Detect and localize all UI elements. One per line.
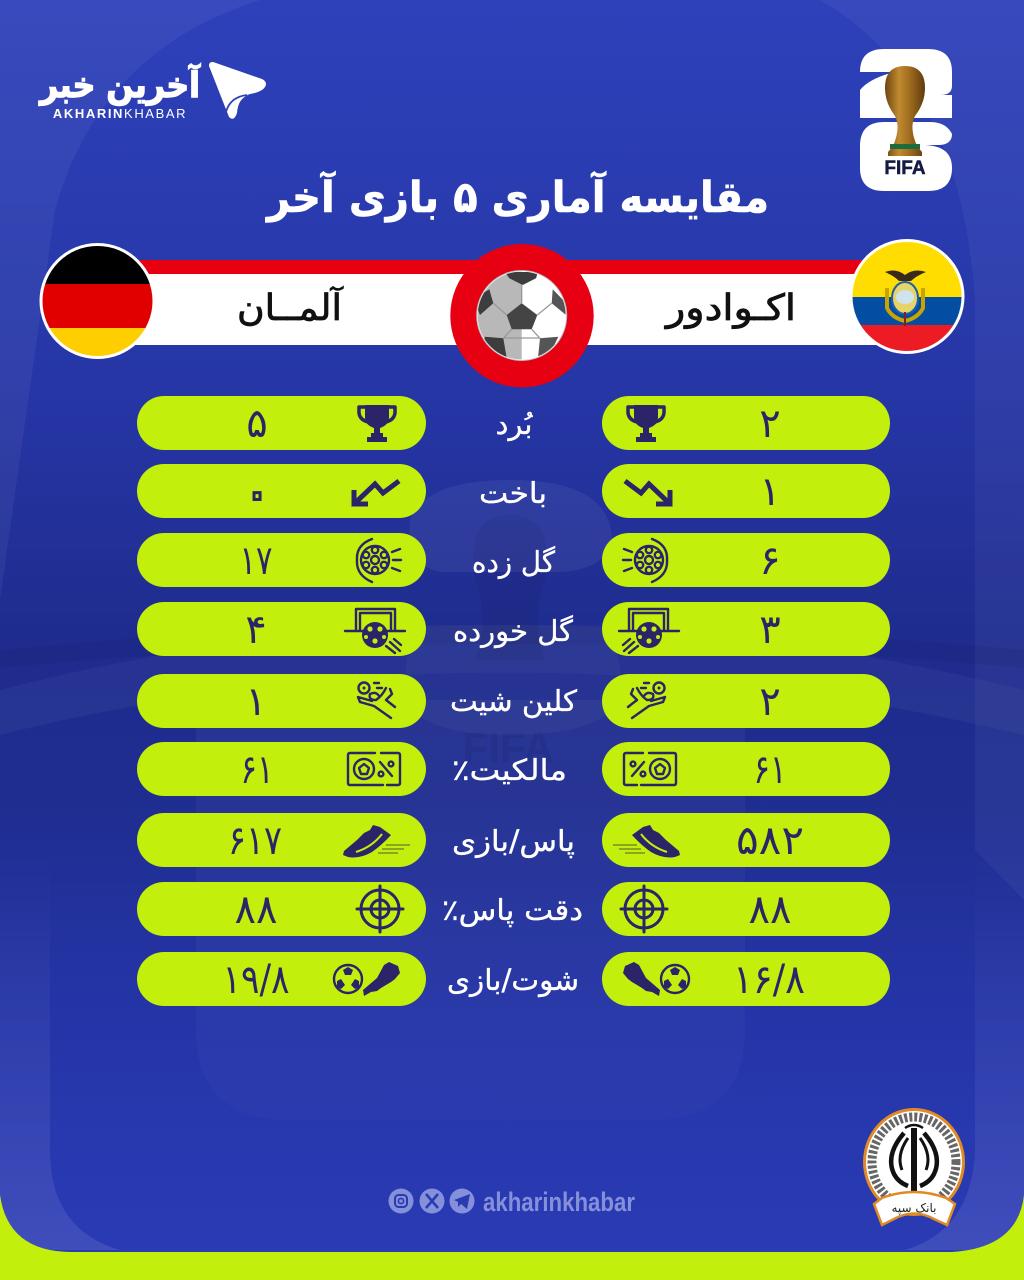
FIFA wordmark: FIFA	[884, 158, 926, 179]
stat row: pass accuracy	[137, 882, 890, 936]
label: شوت/بازی	[447, 963, 579, 997]
Germany value: ۶۱۷	[228, 818, 282, 864]
numeral 6	[860, 122, 952, 191]
Germany value: ۱۷	[240, 538, 272, 584]
Ecuador pill	[602, 602, 890, 656]
Germany pill	[137, 882, 426, 936]
Ecuador value: ۶۱	[754, 747, 786, 793]
Ecuador pill	[602, 813, 890, 867]
watermark 26	[405, 480, 621, 771]
icon: running shoe	[343, 825, 680, 857]
icon: ball in goal	[345, 609, 679, 653]
handle text: akharinkhabar	[483, 1187, 635, 1217]
Ecuador pill	[602, 674, 890, 728]
logo latin name: AKHARINKHABAR	[53, 106, 187, 121]
label: کلین شیت	[450, 684, 577, 718]
Germany value: ۴	[245, 607, 267, 653]
Germany value: ۸۸	[235, 887, 277, 933]
label: پاس/بازی	[452, 824, 575, 859]
Germany value: ۶۱	[240, 747, 274, 793]
watermark 26: FIFA	[462, 724, 554, 771]
stat row: wins	[137, 396, 890, 450]
Ecuador value: ۱۶/۸	[733, 957, 805, 1003]
icon: target	[357, 886, 667, 932]
Ecuador value: ۶	[759, 538, 781, 584]
label: باخت	[479, 476, 547, 510]
Germany pill	[137, 952, 426, 1006]
icon: trend arrows	[354, 481, 670, 504]
icon: boot and ball	[334, 962, 689, 996]
ribbon	[874, 1192, 955, 1225]
stat row: clean sheets	[137, 674, 890, 728]
numeral 2	[860, 49, 952, 118]
label: گل خورده	[453, 614, 573, 648]
Germany value: ۱	[245, 679, 267, 725]
logo: Akharin Khabar	[38, 62, 266, 121]
bank sepah emblem	[863, 1108, 965, 1225]
Germany pill	[137, 602, 426, 656]
Ecuador value: ۱	[759, 469, 781, 515]
icon: possession board	[348, 753, 676, 785]
label: مالکیت٪	[452, 753, 567, 787]
icon: instagram	[388, 1188, 414, 1214]
title: مقایسه آماری ۵ بازی آخر	[265, 171, 769, 223]
label: گل زده	[472, 545, 555, 579]
stat row: shots per game	[137, 952, 890, 1006]
Germany pill	[137, 396, 426, 450]
Ecuador value: ۲	[759, 679, 781, 725]
Ecuador value: ۵۸۲	[736, 818, 804, 864]
trophy	[885, 66, 925, 156]
Germany value: ۰	[242, 461, 272, 526]
flag: Germany	[40, 240, 156, 362]
stat row: possession	[137, 742, 890, 796]
bottom green border	[0, 1195, 1024, 1280]
Germany pill	[137, 742, 426, 796]
bank sepah emblem: بانک سپه	[892, 1201, 936, 1215]
Germany value: ۱۹/۸	[222, 957, 290, 1003]
icon: trophy	[359, 405, 664, 442]
icon: X	[420, 1188, 444, 1214]
team name: Germany: آلمــان	[237, 285, 344, 329]
icon: ball with motion lines	[357, 539, 667, 582]
Germany pill	[137, 533, 426, 587]
Ecuador pill	[602, 533, 890, 587]
label: بُرد	[496, 407, 533, 441]
red ring	[450, 244, 594, 387]
social handle	[388, 1187, 635, 1217]
Ecuador value: ۸۸	[749, 887, 791, 933]
Ecuador value: ۳	[759, 607, 781, 653]
coat of arms	[885, 271, 926, 326]
ball	[476, 270, 567, 362]
stat row: passes per game	[137, 813, 890, 867]
flag: Ecuador	[850, 239, 966, 355]
FIFA 26 logo	[860, 49, 952, 191]
football emblem	[450, 244, 594, 387]
logo play icon	[209, 62, 266, 119]
Germany pill	[137, 464, 426, 518]
Ecuador pill	[602, 952, 890, 1006]
Ecuador pill	[602, 396, 890, 450]
stat row: goals scored	[137, 533, 890, 587]
logo wordmark: آخرین خبر	[38, 63, 201, 106]
Ecuador pill	[602, 464, 890, 518]
Ecuador pill	[602, 742, 890, 796]
Germany pill	[137, 813, 426, 867]
team header bar	[130, 260, 880, 345]
team name: Ecuador: اکـوادور	[664, 288, 796, 329]
stat row: goals conceded	[137, 602, 890, 656]
icon: telegram	[450, 1188, 474, 1214]
label: دقت پاس٪	[442, 893, 583, 928]
icon: goalkeeper	[358, 682, 665, 718]
Ecuador value: ۲	[759, 401, 781, 447]
Germany value: ۵	[246, 401, 268, 447]
stat row: losses	[137, 461, 890, 526]
Germany pill	[137, 674, 426, 728]
Ecuador pill	[602, 882, 890, 936]
